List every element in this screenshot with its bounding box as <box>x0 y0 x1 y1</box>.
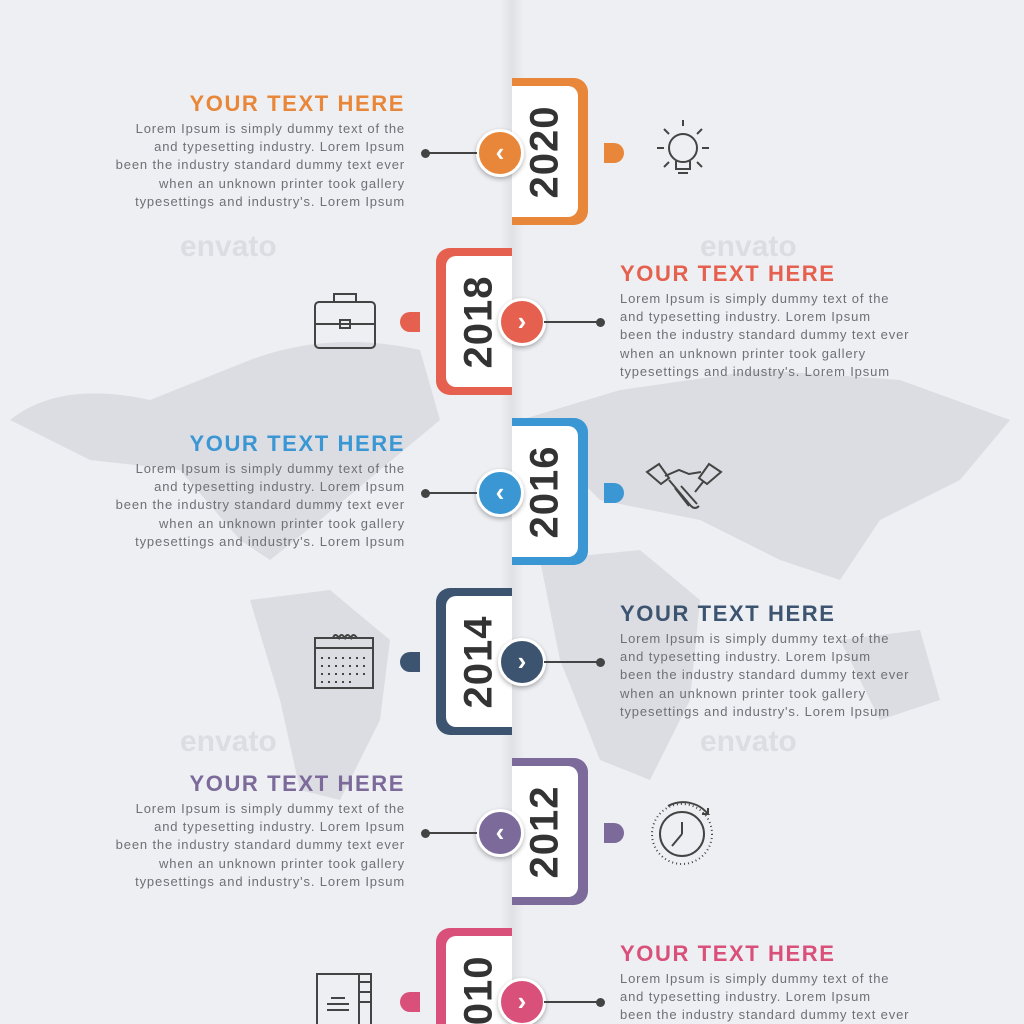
watermark: envato <box>700 230 797 263</box>
row 2018 <box>314 248 909 395</box>
row 2010 <box>316 928 909 1024</box>
arrow circle: ‹ <box>496 817 504 847</box>
text block: typesettings and industry's. Lorem Ipsum <box>135 194 405 209</box>
text block: been the industry standard dummy text ever <box>116 837 405 852</box>
watermark: envato <box>180 725 277 758</box>
watermark: envato <box>180 230 277 263</box>
watermark: envato <box>700 725 797 758</box>
text block: typesettings and industry's. Lorem Ipsum <box>620 704 890 719</box>
text block: and typesetting industry. Lorem Ipsum <box>620 309 871 324</box>
fold shadow <box>500 0 524 1024</box>
icon: calendar <box>314 634 374 689</box>
arrow circle <box>498 298 546 346</box>
text block: and typesetting industry. Lorem Ipsum <box>154 139 405 154</box>
text block: when an unknown printer took gallery <box>159 856 405 871</box>
text block: YOUR TEXT HERE <box>189 431 405 456</box>
arrow circle <box>476 809 524 857</box>
icon: lightbulb <box>657 120 709 174</box>
text block <box>116 771 405 889</box>
arrow circle <box>476 469 524 517</box>
arrow circle: ‹ <box>496 477 504 507</box>
text block: Lorem Ipsum is simply dummy text of the <box>136 801 405 816</box>
year box 2018 <box>436 248 512 395</box>
text block: and typesetting industry. Lorem Ipsum <box>154 479 405 494</box>
year box 2010 <box>436 928 512 1024</box>
arrow circle: › <box>518 646 526 676</box>
arrow circle <box>498 978 546 1024</box>
text block: when an unknown printer took gallery <box>159 516 405 531</box>
year box 2012: 2012 <box>522 785 566 878</box>
text block: YOUR TEXT HERE <box>189 771 405 796</box>
icon: handshake <box>645 462 723 509</box>
text block: YOUR TEXT HERE <box>189 91 405 116</box>
icon: notebook <box>316 973 372 1024</box>
text block <box>116 431 405 549</box>
text block: been the industry standard dummy text ever <box>620 1007 909 1022</box>
text block <box>620 261 909 379</box>
year box 2018: 2018 <box>456 275 500 368</box>
text block: been the industry standard dummy text ever <box>116 497 405 512</box>
arrow circle: › <box>518 986 526 1016</box>
year box 2012 <box>512 758 588 905</box>
arrow circle: ‹ <box>496 137 504 167</box>
year box 2014: 2014 <box>456 615 500 708</box>
year box 2014 <box>436 588 512 735</box>
text block: typesettings and industry's. Lorem Ipsum <box>135 534 405 549</box>
text block: YOUR TEXT HERE <box>620 601 836 626</box>
text block: Lorem Ipsum is simply dummy text of the <box>620 631 889 646</box>
text block: Lorem Ipsum is simply dummy text of the <box>136 121 405 136</box>
text block: and typesetting industry. Lorem Ipsum <box>154 819 405 834</box>
text block: when an unknown printer took gallery <box>620 686 866 701</box>
icon: clock <box>651 801 713 865</box>
text block: when an unknown printer took gallery <box>620 346 866 361</box>
row 2016 <box>116 418 723 565</box>
row 2012 <box>116 758 713 905</box>
year box 2016 <box>512 418 588 565</box>
text block <box>620 601 909 719</box>
text block: and typesetting industry. Lorem Ipsum <box>620 989 871 1004</box>
year box 2020 <box>512 78 588 225</box>
text block <box>620 941 909 1022</box>
text block: YOUR TEXT HERE <box>620 261 836 286</box>
text block: been the industry standard dummy text ever <box>620 327 909 342</box>
text block: Lorem Ipsum is simply dummy text of the <box>136 461 405 476</box>
icon: briefcase <box>314 293 376 349</box>
text block: typesettings and industry's. Lorem Ipsum <box>620 364 890 379</box>
arrow circle <box>498 638 546 686</box>
text block: and typesetting industry. Lorem Ipsum <box>620 649 871 664</box>
text block: Lorem Ipsum is simply dummy text of the <box>620 971 889 986</box>
row 2014 <box>314 588 909 735</box>
text block: YOUR TEXT HERE <box>620 941 836 966</box>
arrow circle <box>476 129 524 177</box>
arrow circle: › <box>518 306 526 336</box>
text block: been the industry standard dummy text ever <box>620 667 909 682</box>
year box 2016: 2016 <box>522 445 566 538</box>
year box 2020: 2020 <box>522 105 566 198</box>
row 2020 <box>116 78 709 225</box>
text block: been the industry standard dummy text ever <box>116 157 405 172</box>
text block: when an unknown printer took gallery <box>159 176 405 191</box>
text block: Lorem Ipsum is simply dummy text of the <box>620 291 889 306</box>
text block: typesettings and industry's. Lorem Ipsum <box>135 874 405 889</box>
text block <box>116 91 405 209</box>
